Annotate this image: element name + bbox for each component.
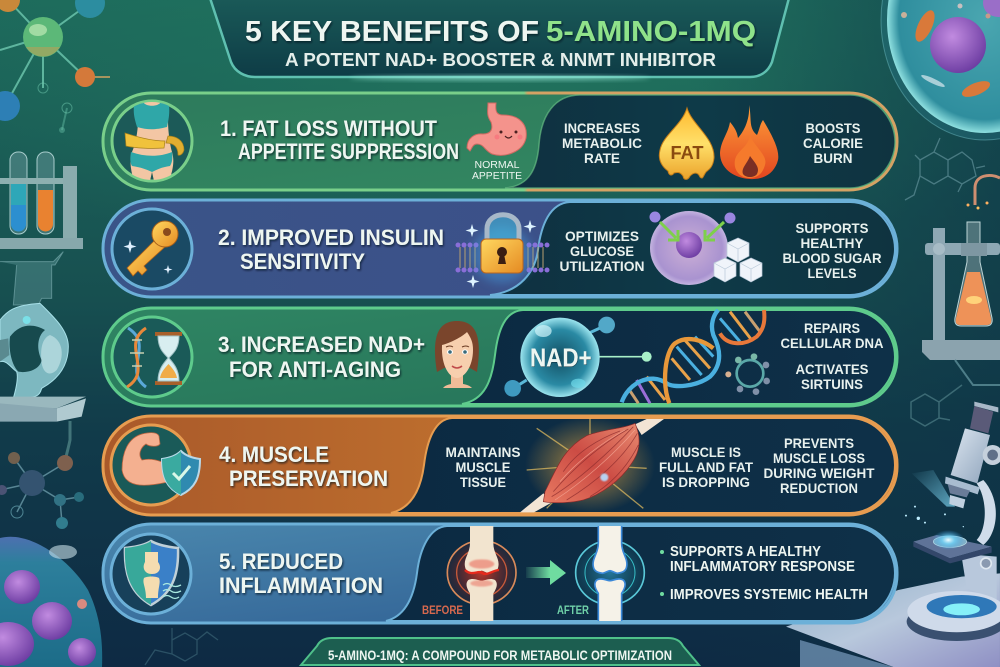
- heading: FOR ANTI-AGING: [229, 357, 401, 382]
- text: supports healthy blood sugar levels: HEALTHY: [800, 235, 864, 251]
- heading: [219, 442, 388, 491]
- arrow: [526, 560, 566, 585]
- bullet list: [660, 544, 868, 603]
- icon: muscle with glow: [520, 417, 664, 513]
- icon: NAD+ bubble and line: [504, 317, 652, 397]
- text: prevents muscle loss: PREVENTS: [784, 435, 854, 451]
- icon: joint shield: [111, 534, 191, 614]
- bullet list: SUPPORTS A HEALTHY: [670, 544, 821, 560]
- icon: fat drop: FAT: [670, 143, 704, 163]
- title banner: [210, 0, 789, 80]
- panel: benefit 1 fat loss: [103, 93, 897, 190]
- text: increases metabolic rate: [562, 120, 642, 166]
- text: muscle is full and fat is dropping: IS DROPPING: [662, 474, 750, 490]
- heading: 4. MUSCLE: [219, 442, 329, 467]
- icon: waist and measuring tape: [112, 95, 192, 190]
- right dark section: [391, 418, 895, 513]
- test tube rack: [0, 152, 83, 249]
- footer text: 5-AMINO-1MQ: A COMPOUND FOR METABOLIC OPTIMIZATION: [328, 648, 672, 663]
- heading: 1. FAT LOSS WITHOUT: [220, 116, 437, 141]
- text: boosts calorie burn: CALORIE: [803, 135, 863, 151]
- heading: 5. REDUCED: [219, 549, 343, 574]
- right dark section: [505, 95, 895, 188]
- text: repairs cellular DNA / activates sirtuins: [780, 320, 884, 392]
- footer banner: [301, 638, 699, 665]
- left lab illustrations: [0, 0, 110, 667]
- subtitle: A POTENT NAD+ BOOSTER & NNMT INHIBITOR: [285, 50, 716, 70]
- title: 5 KEY BENEFITS OF: [245, 16, 539, 48]
- text: optimizes glucose utilization: [560, 228, 644, 274]
- panel: benefit 4 muscle preservation: [103, 416, 897, 515]
- text: supports healthy blood sugar levels: SUPPORTS: [796, 220, 868, 236]
- heading: SENSITIVITY: [240, 249, 365, 274]
- text: boosts calorie burn: BURN: [814, 150, 852, 166]
- text: increases metabolic rate: RATE: [584, 150, 620, 166]
- icon: NAD+ bubble and line: NAD+: [530, 343, 592, 373]
- text: boosts calorie burn: BOOSTS: [806, 120, 860, 136]
- icon: DNA and hourglass: [112, 317, 192, 397]
- icon: woman's face: [435, 321, 479, 388]
- text: supports healthy blood sugar levels: [782, 220, 882, 281]
- normal appetite label: [472, 159, 522, 182]
- microscope: [905, 402, 1000, 641]
- heading: [219, 549, 383, 598]
- icon: sirtuin ring: [725, 353, 770, 395]
- text: repairs cellular DNA / activates sirtuins: SIRTUINS: [801, 376, 863, 392]
- text: maintains muscle tissue: MAINTAINS: [446, 444, 520, 460]
- text: optimizes glucose utilization: OPTIMIZES: [565, 228, 639, 244]
- icon: cell absorbing glucose: [650, 211, 762, 285]
- icon: golden key: [112, 209, 192, 289]
- heading: INFLAMMATION: [219, 573, 383, 598]
- panel: benefit 5 reduced inflammation: [103, 523, 897, 623]
- icon: healthy joint after: [576, 523, 644, 623]
- title: 5-AMINO-1MQ: [546, 16, 756, 48]
- text: repairs cellular DNA / activates sirtuins: CELLULAR DNA: [780, 335, 884, 351]
- glass apparatus: [0, 252, 86, 422]
- text: prevents muscle loss: REDUCTION: [780, 480, 858, 496]
- flask stand: [922, 175, 1000, 385]
- after label: AFTER: [557, 605, 590, 617]
- lab bench: [786, 573, 1000, 667]
- text: muscle is full and fat is dropping: FULL AND FAT: [659, 459, 753, 475]
- heading: [220, 116, 459, 164]
- panel: benefit 2 insulin sensitivity: [103, 200, 897, 297]
- icon: padlock on membrane: [456, 215, 550, 288]
- icon: fat drop: [659, 108, 714, 179]
- text: prevents muscle loss: DURING WEIGHT: [764, 465, 875, 481]
- text: repairs cellular DNA / activates sirtuins: ACTIVATES: [796, 361, 868, 377]
- normal appetite label: NORMAL: [474, 159, 520, 171]
- heading: 2. IMPROVED INSULIN: [218, 225, 444, 250]
- panel: benefit 3 NAD+ anti-aging: [103, 308, 897, 406]
- text: repairs cellular DNA / activates sirtuins: REPAIRS: [804, 320, 860, 336]
- icon: flexed arm and shield: [111, 425, 200, 505]
- molecule: top left: [0, 0, 110, 133]
- normal appetite label: APPETITE: [472, 170, 522, 182]
- heading: 3. INCREASED NAD+: [218, 332, 425, 357]
- right dark section: [462, 310, 895, 404]
- heading: PRESERVATION: [229, 466, 388, 491]
- molecule: lower left: [0, 421, 84, 529]
- text: supports healthy blood sugar levels: LEVELS: [808, 265, 856, 281]
- text: increases metabolic rate: INCREASES: [564, 120, 640, 136]
- bullet list: IMPROVES SYSTEMIC HEALTH: [670, 587, 868, 603]
- text: muscle is full and fat is dropping: MUSCLE IS: [671, 444, 741, 460]
- text: maintains muscle tissue: TISSUE: [460, 474, 506, 490]
- chemical structure: lower left of footer: [145, 628, 218, 665]
- text: increases metabolic rate: METABOLIC: [562, 135, 642, 151]
- heading: [218, 332, 425, 382]
- icon: flame: [720, 105, 778, 179]
- text: boosts calorie burn: [803, 120, 863, 166]
- before label: BEFORE: [422, 605, 463, 617]
- title: [245, 16, 756, 48]
- text: maintains muscle tissue: MUSCLE: [456, 459, 510, 475]
- text: maintains muscle tissue: [446, 444, 520, 490]
- cell: bottom left: [0, 537, 102, 667]
- heading: [218, 225, 444, 274]
- heading: APPETITE SUPPRESSION: [238, 139, 459, 164]
- text: supports healthy blood sugar levels: BLOOD SUGAR: [782, 250, 882, 266]
- text: optimizes glucose utilization: UTILIZATION: [560, 258, 644, 274]
- icon: DNA helix: [622, 310, 764, 403]
- right dark section: [386, 526, 895, 621]
- chemical structure: mid right: [911, 385, 962, 426]
- cell: top right: [881, 0, 1000, 140]
- right dark section: [490, 202, 895, 295]
- icon: happy stomach: [467, 103, 526, 155]
- text: optimizes glucose utilization: GLUCOSE: [570, 243, 634, 259]
- chemical structure: upper right: [905, 138, 985, 200]
- text: prevents muscle loss: MUSCLE LOSS: [773, 450, 865, 466]
- text: muscle is full and fat is dropping: [659, 444, 753, 490]
- icon: inflamed joint before: [447, 523, 516, 623]
- text: prevents muscle loss: [764, 435, 875, 496]
- bullet list: INFLAMMATORY RESPONSE: [670, 559, 855, 575]
